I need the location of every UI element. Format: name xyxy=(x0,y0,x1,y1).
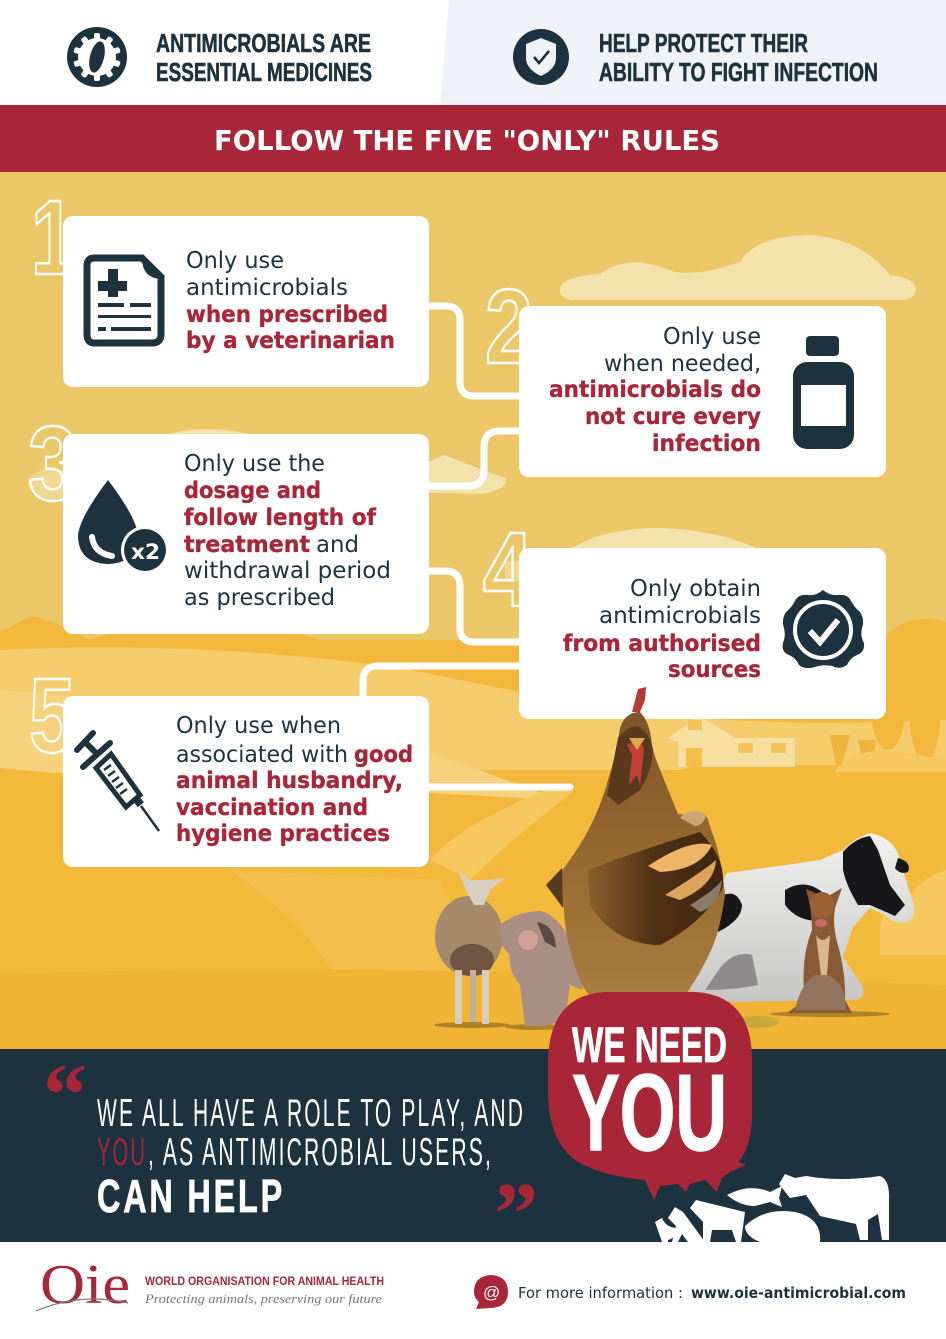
outlined number 1: 1 xyxy=(31,179,75,297)
icon: prescription document xyxy=(87,258,161,343)
text: rule 2 xyxy=(549,324,761,457)
heading: essential medicines xyxy=(156,28,372,87)
clouds xyxy=(28,235,916,582)
dog xyxy=(787,888,852,1013)
pig xyxy=(500,911,584,1026)
opening quote mark: “ xyxy=(43,1047,87,1144)
heading: essential medicines: ANTIMICROBIALS ARE xyxy=(156,28,371,58)
fish silhouette xyxy=(727,1186,782,1207)
dog silhouette xyxy=(668,1207,705,1242)
text: rule 2: when needed, xyxy=(604,351,761,377)
call to action band xyxy=(0,1047,946,1263)
footer organisation name: Protecting animals, preserving our future xyxy=(144,1291,382,1306)
text: rule 5: Only use when xyxy=(176,713,341,739)
footer organisation name: WORLD ORGANISATION FOR ANIMAL HEALTH xyxy=(145,1274,384,1288)
text: rule 1 xyxy=(186,248,395,354)
heading: protect ability: HELP PROTECT THEIR xyxy=(599,28,808,58)
text: rule 5: associated with xyxy=(176,742,348,768)
card 4: authorised sources xyxy=(519,548,886,719)
outlined number 3: 3 xyxy=(28,405,78,523)
text: rule 5 xyxy=(176,713,413,847)
farmhouse xyxy=(668,716,795,767)
outlined number 5: 5 xyxy=(29,657,75,775)
puddle xyxy=(735,1016,779,1028)
card 5: good husbandry xyxy=(63,696,429,867)
footer logo: Oie xyxy=(40,1254,130,1316)
closing quote mark: ” xyxy=(494,1166,538,1263)
text: rule 5: animal husbandry, xyxy=(176,768,403,794)
sheep silhouette xyxy=(745,1211,820,1242)
text: rule 4: antimicrobials xyxy=(599,603,761,629)
quote text: WE ALL HAVE A ROLE TO PLAY, AND xyxy=(97,1092,525,1135)
speech bubble: we need you xyxy=(548,992,752,1200)
text: rule 5: hygiene practices xyxy=(176,821,390,847)
title banner xyxy=(0,105,946,172)
heading: protect ability xyxy=(599,28,878,87)
goat silhouette xyxy=(690,1200,745,1242)
sheep xyxy=(435,870,505,1024)
hen xyxy=(546,687,725,1000)
footer contact text: For more information : xyxy=(518,1284,683,1302)
text: rule 2: antimicrobials do xyxy=(549,377,761,403)
footer contact text xyxy=(518,1284,906,1302)
hen silhouette xyxy=(655,1218,678,1242)
icon: medicine bottle xyxy=(793,336,854,449)
footer contact icon xyxy=(474,1275,508,1309)
trees xyxy=(830,647,941,770)
icon: drop x2 xyxy=(78,480,169,574)
text: rule 3 xyxy=(184,451,391,611)
icon: microbe gear xyxy=(67,27,127,87)
text: rule 3: Only use the xyxy=(184,451,325,477)
cow xyxy=(690,833,914,1002)
text: rule 5: good xyxy=(354,742,413,768)
fish xyxy=(705,954,758,990)
card 1: prescribed by a veterinarian xyxy=(63,216,429,387)
footer contact text: www.oie-antimicrobial.com xyxy=(691,1284,906,1302)
outlined number 2: 2 xyxy=(485,268,533,386)
text: rule 3: treatment xyxy=(184,532,310,558)
hills xyxy=(0,616,946,1049)
text: rule 3: and xyxy=(316,532,359,558)
header: right panel xyxy=(440,0,946,105)
card 2: when needed xyxy=(519,306,886,477)
text: rule 4 xyxy=(563,576,761,683)
text: rule 3: withdrawal period xyxy=(184,558,391,584)
text: rule 5: vaccination and xyxy=(176,795,368,821)
footer contact icon: @ xyxy=(483,1283,500,1302)
quote text: CAN HELP xyxy=(97,1170,285,1222)
quote text xyxy=(97,1092,525,1222)
white animal silhouettes xyxy=(655,1174,889,1242)
icon: drop x2: x2 xyxy=(131,540,160,564)
heading: essential medicines: ESSENTIAL MEDICINES xyxy=(156,57,372,87)
text: rule 4: from authorised xyxy=(563,631,761,657)
icon: shield xyxy=(513,29,569,85)
text: rule 3: as prescribed xyxy=(184,585,335,611)
animals illustration xyxy=(434,687,914,1030)
text: rule 4: sources xyxy=(668,657,761,683)
text: rule 2: Only use xyxy=(663,324,761,350)
quote text: , AS ANTIMICROBIAL USERS, xyxy=(148,1131,493,1174)
cow silhouette xyxy=(779,1174,889,1240)
text: rule 1: Only use xyxy=(186,248,284,274)
text: rule 4: Only obtain xyxy=(630,576,761,602)
text: rule 1: antimicrobials xyxy=(186,275,348,301)
speech bubble: we need you: YOU xyxy=(572,1052,727,1174)
title banner: FOLLOW THE FIVE "ONLY" RULES xyxy=(214,124,720,157)
ground shadows xyxy=(434,1011,890,1030)
text: rule 1: when prescribed xyxy=(186,302,388,328)
footer organisation name xyxy=(144,1274,384,1306)
speech bubble: we need you: WE NEED xyxy=(572,1017,727,1073)
connectors between cards xyxy=(363,306,570,787)
text: rule 2: not cure every xyxy=(585,404,761,430)
quote text: YOU xyxy=(97,1131,147,1174)
icon: syringe xyxy=(77,733,159,831)
outlined number 4: 4 xyxy=(483,511,533,629)
text: rule 2: infection xyxy=(652,431,761,457)
text: rule 1: by a veterinarian xyxy=(186,328,395,354)
text: rule 3: follow length of xyxy=(184,505,377,531)
icon: certified badge xyxy=(783,590,864,668)
card 3: dosage xyxy=(63,434,429,634)
text: rule 3: dosage and xyxy=(184,478,321,504)
header: left panel xyxy=(0,0,449,105)
landscape background xyxy=(0,172,946,1049)
